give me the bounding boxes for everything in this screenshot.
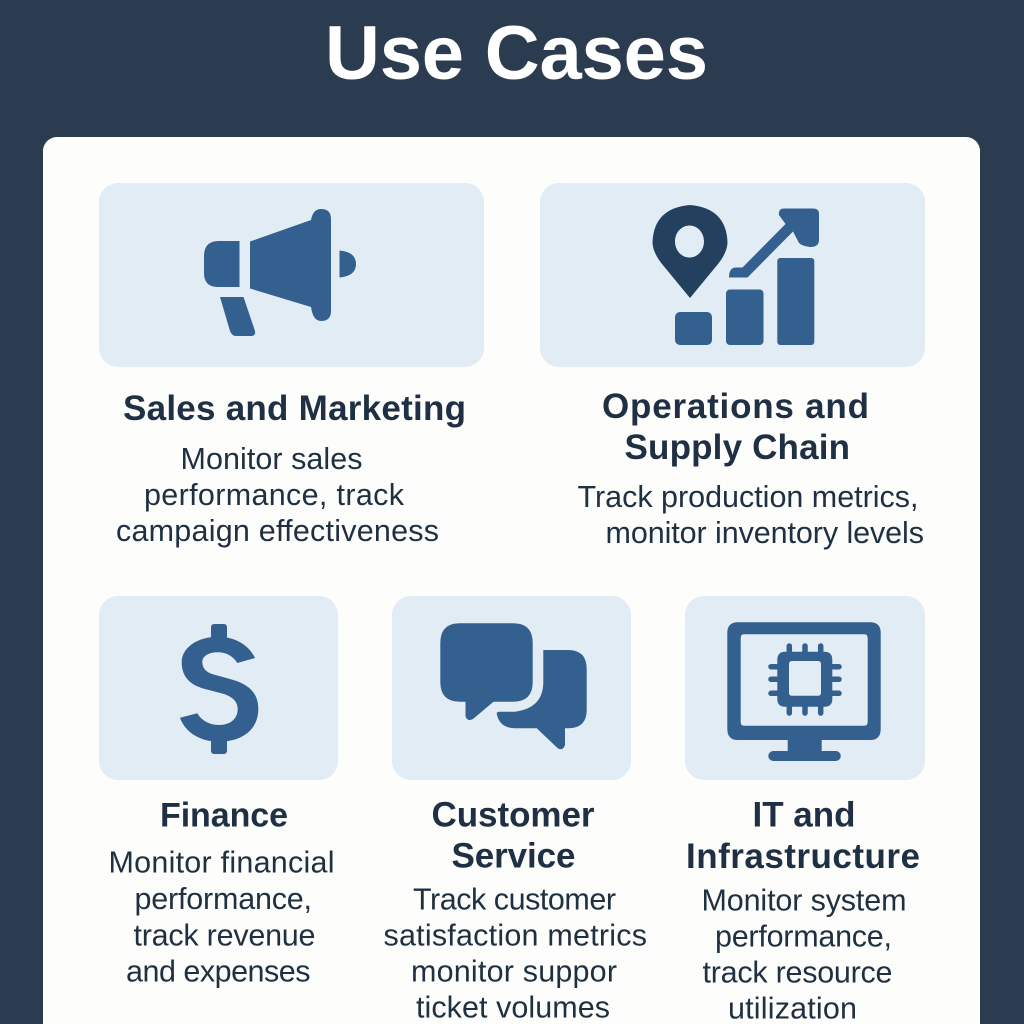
text: customer service description: Track customer <box>413 882 616 916</box>
text: finance description: Monitor financial <box>108 846 334 880</box>
text: IT description: performance, <box>715 920 892 954</box>
icon: monitor with chip <box>727 622 881 761</box>
heading: IT and infrastructure <box>686 796 920 876</box>
panel: sales and marketing <box>99 183 484 548</box>
heading: finance: Finance <box>160 796 288 834</box>
text: finance description: track revenue <box>134 918 316 952</box>
icon tile: operations <box>540 183 925 367</box>
title: Use Cases <box>325 11 708 96</box>
heading: operations and supply chain <box>602 387 869 467</box>
icon tile: IT <box>685 596 925 780</box>
text: customer service description: ticket volumes <box>416 990 610 1024</box>
text: sales description: campaign effectiveness <box>116 514 439 548</box>
heading: customer service: Service <box>452 836 576 876</box>
text: finance description: performance, <box>134 882 312 916</box>
text: sales description: Monitor sales <box>180 442 362 476</box>
icon: dollar sign <box>180 624 258 754</box>
text: customer service description: satisfaction metrics <box>384 919 647 953</box>
icon tile: sales <box>99 183 484 367</box>
text: operations description: Track production metrics, <box>578 480 918 514</box>
panel: finance <box>99 596 338 989</box>
heading: IT and infrastructure: IT and <box>752 796 856 835</box>
panel: customer service <box>384 596 647 1024</box>
icon: map pin with bars and arrow <box>652 205 819 345</box>
text: IT description <box>702 884 906 1024</box>
heading: customer service <box>432 796 595 876</box>
text: sales description <box>116 442 439 548</box>
heading: sales and marketing: Sales and Marketing <box>123 389 466 428</box>
icon tile: customer service <box>392 596 631 780</box>
text: customer service description <box>384 882 647 1024</box>
panel: operations and supply chain <box>540 183 925 550</box>
text: finance description <box>108 846 334 989</box>
heading: operations and supply chain: Operations and <box>602 387 869 426</box>
heading: operations and supply chain: Supply Chain <box>624 428 850 467</box>
text: operations description <box>578 480 924 550</box>
heading: customer service: Customer <box>432 796 595 834</box>
panel: IT and infrastructure <box>685 596 925 1024</box>
panel: main white card <box>43 137 980 1024</box>
text: IT description: track resource <box>702 955 892 989</box>
text: finance description: and expenses <box>126 955 310 989</box>
heading: IT and infrastructure: Infrastructure <box>686 837 920 876</box>
icon: chat bubbles <box>440 623 587 749</box>
icon tile: finance <box>99 596 338 780</box>
text: customer service description: monitor suppor <box>411 955 617 989</box>
text: IT description: Monitor system <box>702 884 906 918</box>
icon: megaphone <box>204 209 356 336</box>
text: sales description: performance, track <box>144 478 405 512</box>
text: operations description: monitor inventory levels <box>606 516 924 550</box>
